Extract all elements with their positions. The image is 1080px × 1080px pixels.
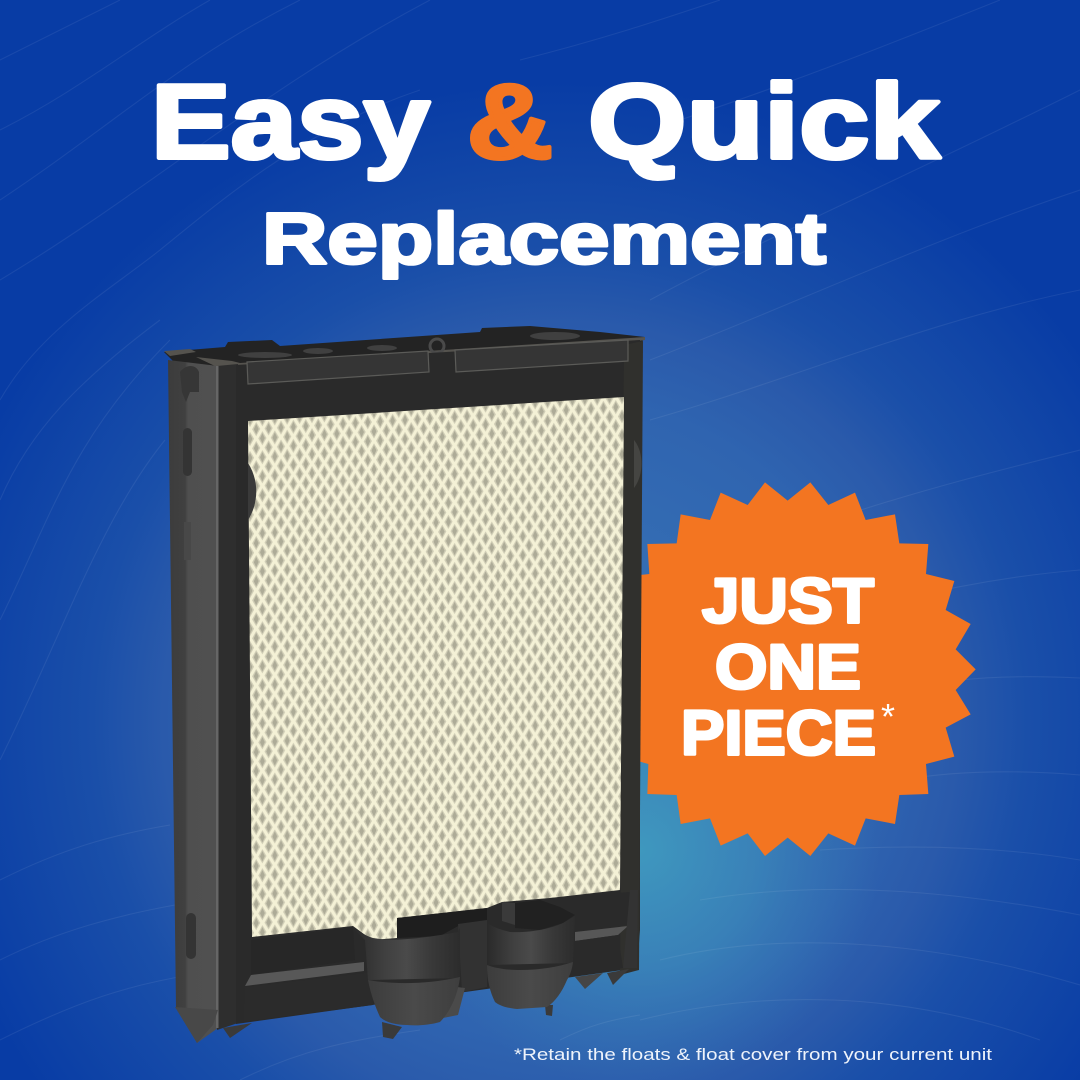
title: Easy & Quick: & <box>467 63 553 181</box>
title: Easy & Quick: Quick <box>588 63 941 181</box>
side clips <box>248 440 642 520</box>
float cup left <box>353 927 465 1039</box>
frame bottom tip <box>175 1007 218 1043</box>
lower frame panels <box>223 890 638 1038</box>
orange starburst badge <box>640 482 976 856</box>
frame left side panel <box>168 360 238 1043</box>
top header panels <box>247 340 628 384</box>
frame main body <box>236 340 640 1024</box>
filter top rim <box>164 326 645 372</box>
title: Easy & Quick <box>151 63 941 181</box>
badge text: JUST ONE PIECE* <box>681 566 895 768</box>
title: Easy & Quick: Easy <box>151 63 430 181</box>
badge text: JUST ONE PIECE*: PIECE <box>681 698 876 768</box>
badge text: JUST ONE PIECE*: ONE <box>715 632 861 702</box>
float cup right <box>487 900 575 1016</box>
honeycomb filter media <box>248 397 624 940</box>
footnote: *Retain the floats & float cover from your current unit <box>514 1045 992 1064</box>
frame right edge <box>620 341 643 975</box>
badge text: JUST ONE PIECE*: * <box>881 696 895 737</box>
badge text: JUST ONE PIECE*: JUST <box>702 566 874 636</box>
subtitle: Replacement: Replacement <box>262 200 826 280</box>
replacement filter product <box>164 326 645 1043</box>
